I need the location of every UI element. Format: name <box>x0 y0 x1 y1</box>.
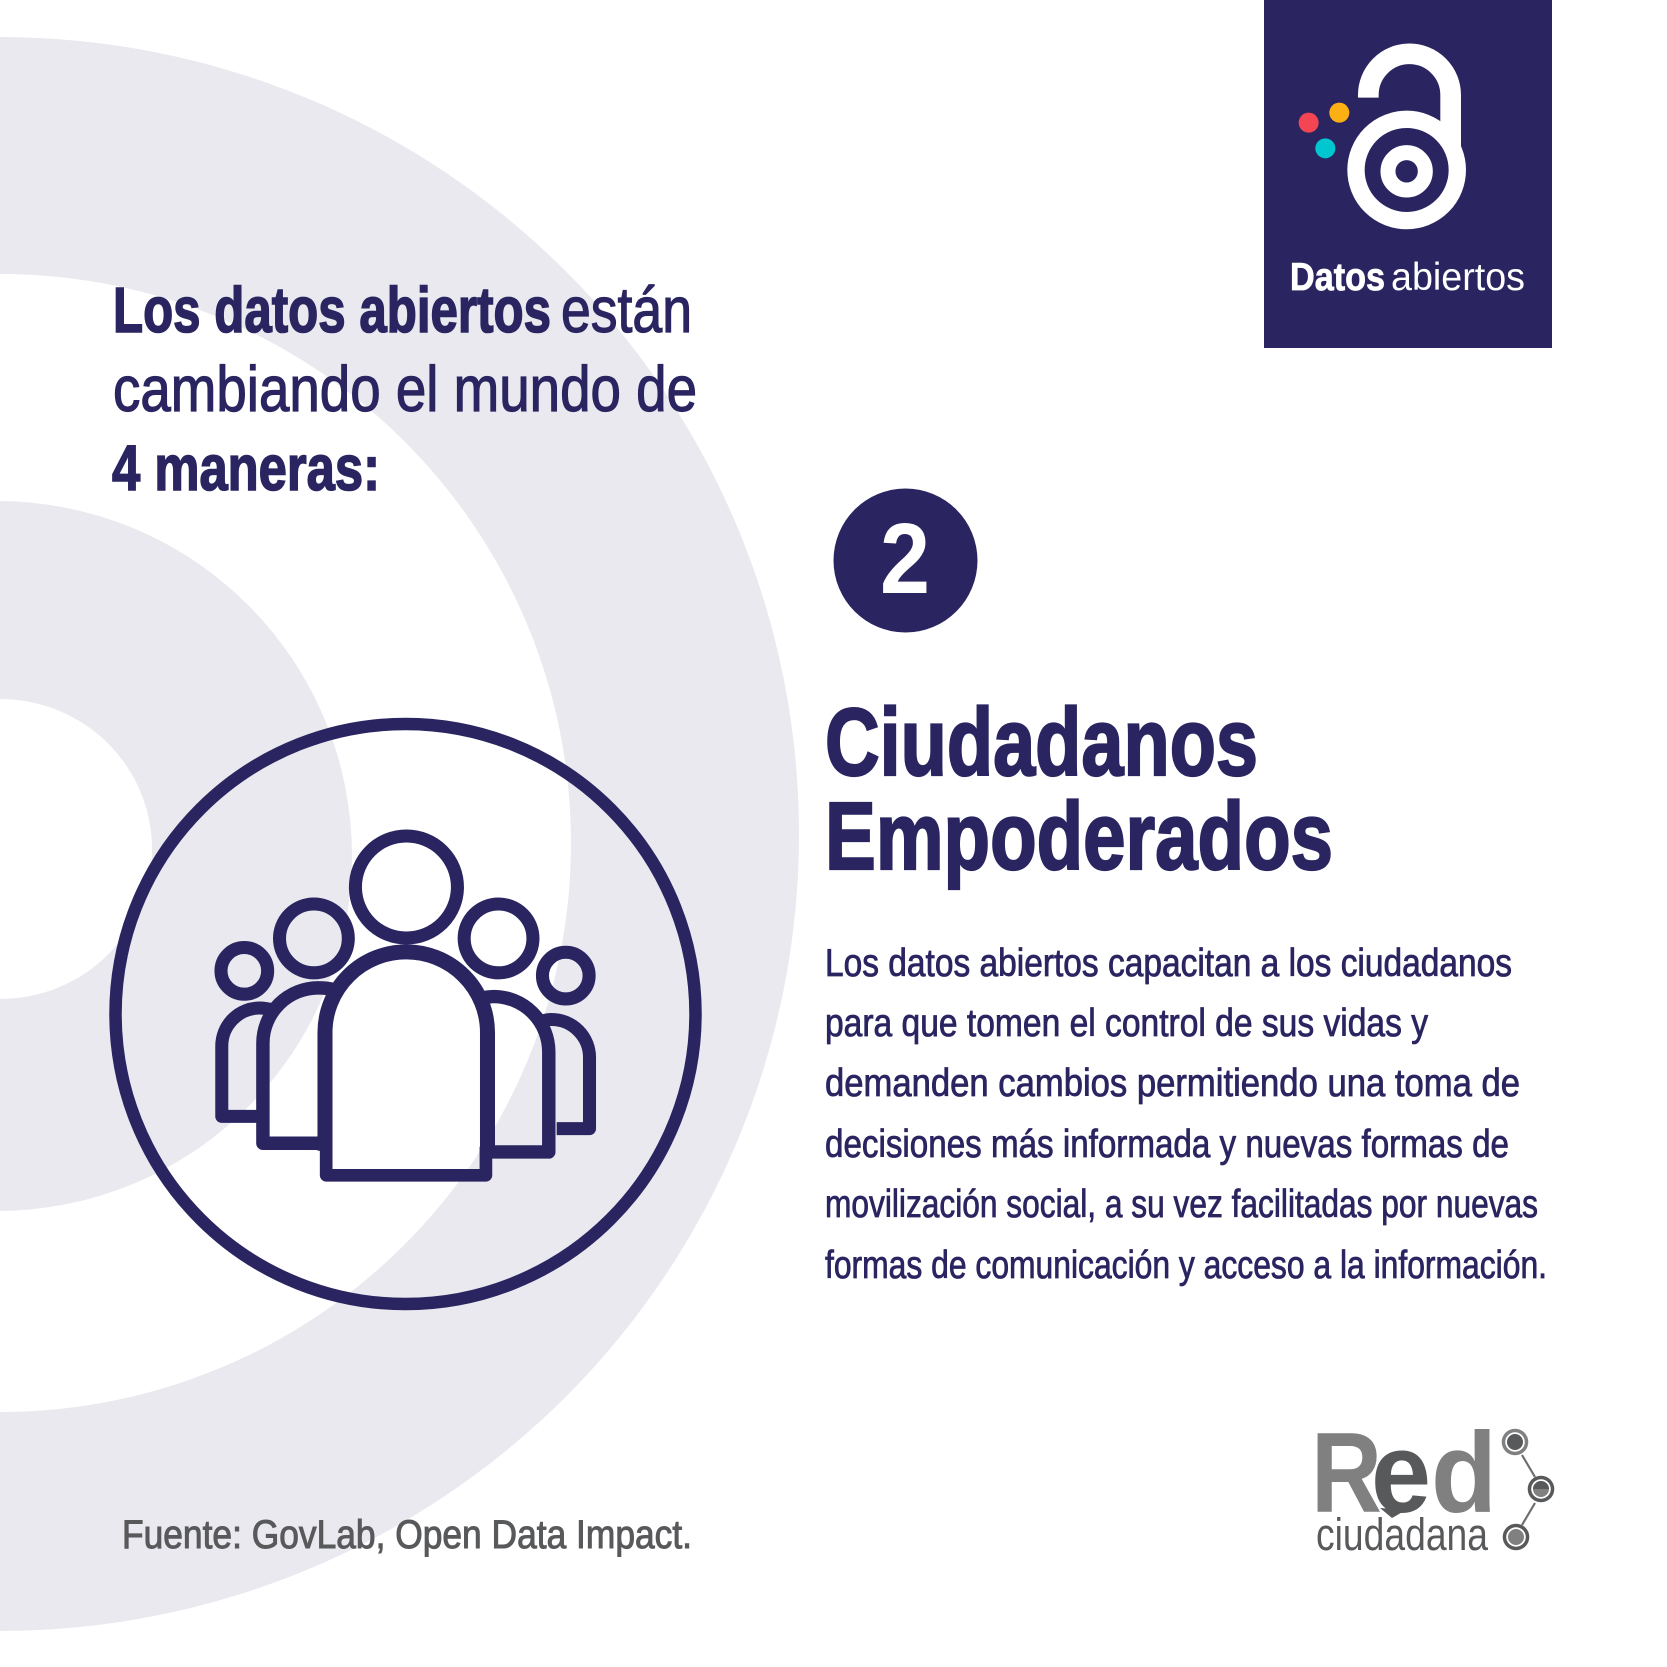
source note: Fuente: GovLab, Open Data Impact. <box>122 1513 692 1557</box>
body text: demanden cambios permitiendo una toma de <box>825 1062 1520 1105</box>
icon: open padlock <box>1299 54 1461 221</box>
heading: intro: 4 maneras: <box>112 432 380 504</box>
wordmark <box>1311 1410 1497 1560</box>
heading: intro: están <box>561 274 692 346</box>
title: Ciudadanos Empoderados <box>825 689 1333 890</box>
heading: intro: cambiando el mundo de <box>113 353 697 425</box>
body text: para que tomen el control de sus vidas y <box>825 1002 1429 1045</box>
body text: decisiones más informada y nuevas formas de <box>825 1123 1509 1166</box>
wordmark: R <box>1311 1410 1382 1537</box>
number badge <box>834 488 978 632</box>
icon: group of people in circle <box>116 724 696 1304</box>
badge: Datos abiertos logo <box>1264 0 1552 348</box>
badge label: abiertos <box>1391 256 1525 299</box>
network nodes <box>1502 1429 1554 1550</box>
title: Ciudadanos Empoderados: Ciudadanos <box>825 689 1258 796</box>
badge label <box>1290 256 1525 299</box>
wordmark: d <box>1431 1410 1497 1537</box>
badge label: Datos <box>1290 256 1385 299</box>
body text: movilización social, a su vez facilitadas por nuevas <box>825 1183 1538 1226</box>
wordmark: ciudadana <box>1316 1509 1489 1560</box>
body text <box>825 942 1547 1287</box>
logo: Red ciudadana <box>1311 1410 1554 1560</box>
wordmark: e <box>1371 1410 1431 1537</box>
heading: intro: Los datos abiertos <box>113 274 551 346</box>
body text: Los datos abiertos capacitan a los ciudadanos <box>825 942 1512 985</box>
number badge: 2 <box>880 503 930 615</box>
heading: intro <box>112 274 697 504</box>
title: Ciudadanos Empoderados: Empoderados <box>825 783 1333 890</box>
